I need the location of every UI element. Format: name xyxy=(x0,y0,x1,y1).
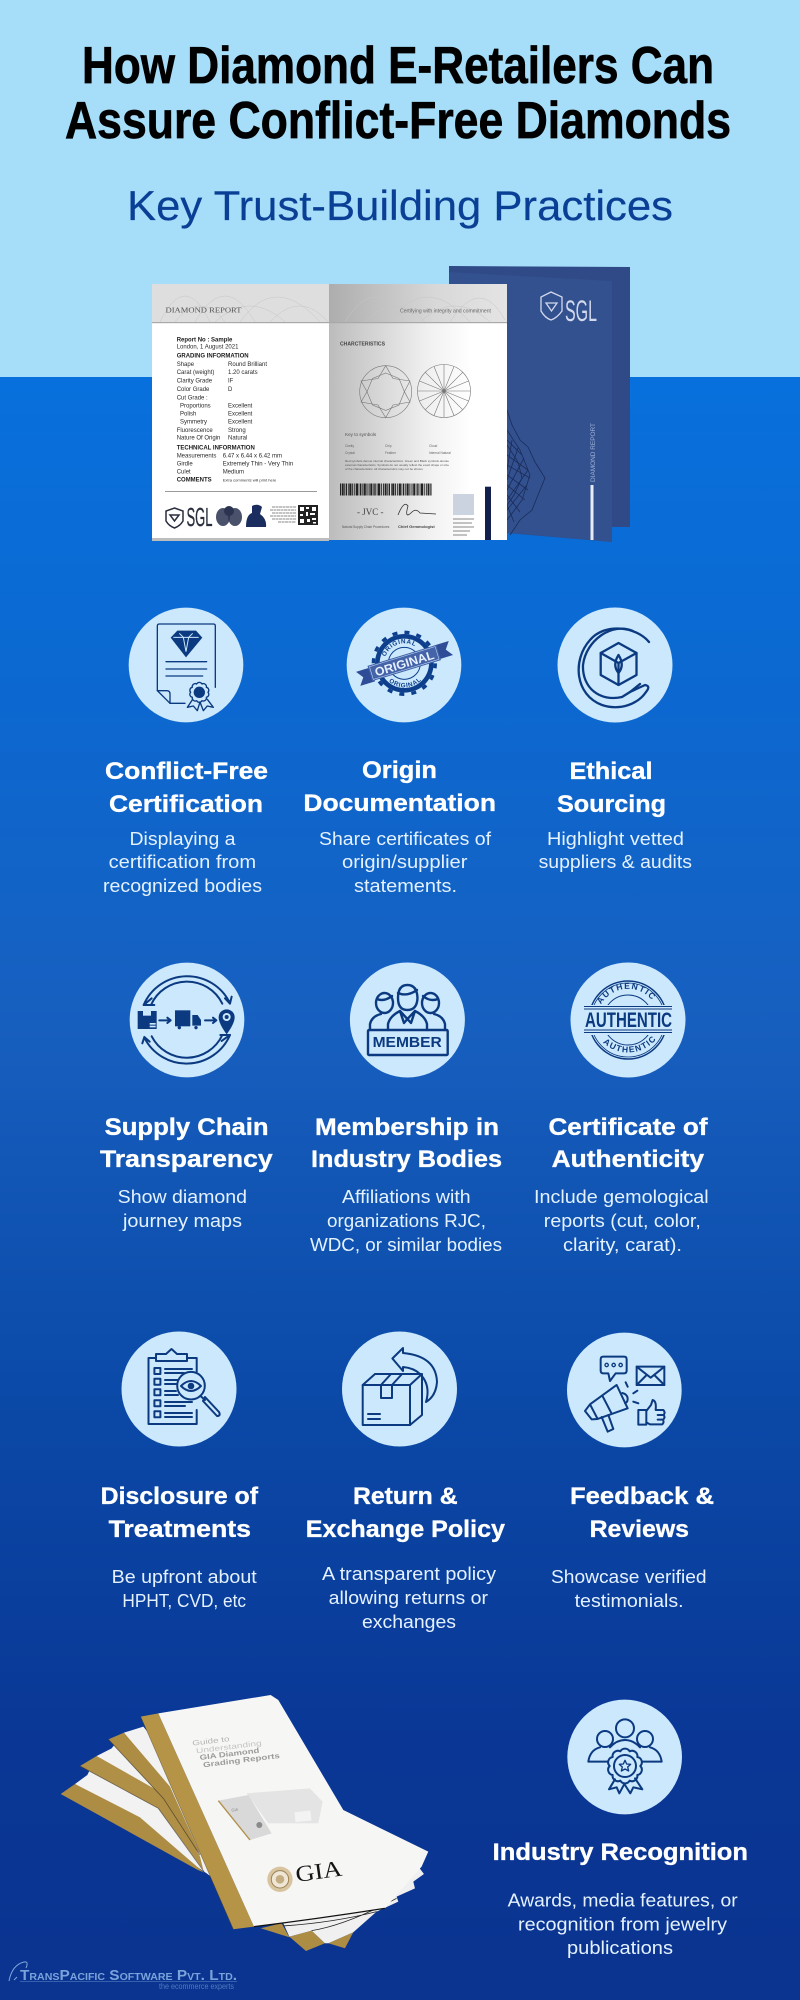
report: open pages: Cloud xyxy=(429,444,438,448)
report: open pages: CHARCTERISTICS xyxy=(340,342,385,348)
report: open pages: Natural xyxy=(228,436,247,442)
description: A transparent policy xyxy=(322,1563,497,1584)
heading xyxy=(306,1483,505,1543)
report: open pages: Certifying with integrity and commitment xyxy=(400,308,492,314)
description: exchanges xyxy=(362,1611,456,1632)
heading: Membership in xyxy=(315,1114,499,1141)
report: open pages: Excellent xyxy=(228,412,253,418)
report: open pages: Red symbols denote internal characteristics. Green and Black symbols denote xyxy=(345,459,449,463)
description: origin/supplier xyxy=(342,851,468,872)
icon: supply chain loop xyxy=(130,963,244,1077)
heading: Authenticity xyxy=(552,1146,704,1173)
description xyxy=(319,828,492,896)
report: open pages: - JVC - xyxy=(357,507,384,517)
report: open pages: Cut Grade : xyxy=(177,396,208,402)
report: open pages: Internal Natural xyxy=(429,451,451,455)
icon: member group xyxy=(350,962,465,1078)
icon: megaphone with feedback symbols xyxy=(567,1333,682,1447)
report: open pages: D xyxy=(228,387,233,393)
report: open pages: Fluorescence xyxy=(177,428,213,434)
description xyxy=(539,828,692,872)
report: open pages: Polish xyxy=(180,412,196,418)
heading xyxy=(557,758,666,818)
heading xyxy=(311,1114,502,1173)
icon: original stamp: ORIGINAL xyxy=(382,638,415,656)
heading: Transparency xyxy=(100,1146,273,1173)
top brochure sheet: Understanding xyxy=(195,1738,262,1755)
heading xyxy=(101,1483,259,1543)
top brochure sheet: GIA xyxy=(294,1856,344,1887)
icon: member group: MEMBER xyxy=(373,1034,442,1051)
report: open pages: Clarity xyxy=(345,444,354,448)
report: open pages: Extra comments will print here xyxy=(223,477,277,482)
report: open pages: Measurements xyxy=(177,453,216,459)
description: Showcase verified xyxy=(551,1566,707,1587)
description: statements. xyxy=(354,875,457,896)
description: Highlight vetted xyxy=(547,828,684,849)
footer logo: TransPacific Software: the ecommerce experts xyxy=(159,1982,234,1991)
card: supply chain transparency xyxy=(100,963,273,1231)
SGL diamond report image xyxy=(152,266,630,542)
heading: Certificate of xyxy=(548,1114,708,1141)
report: open pages: Key to symbols xyxy=(345,432,377,437)
footer logo: TransPacific Software: TransPacific Software Pvt. Ltd. xyxy=(20,1968,237,1984)
icon: checklist with magnifier xyxy=(122,1332,236,1446)
heading: Return & xyxy=(353,1483,458,1510)
report: open pages: GRADING INFORMATION xyxy=(177,354,249,360)
report: open pages: of the characteristics. All characteristics may not be shown. xyxy=(345,467,424,471)
report: open pages: Nature Of Origin xyxy=(177,436,220,442)
description: WDC, or similar bodies xyxy=(310,1234,502,1255)
report: open pages: Excellent xyxy=(228,404,253,410)
card: certificate of authenticity xyxy=(534,962,709,1255)
description: recognition from jewelry xyxy=(518,1914,728,1935)
report: open pages xyxy=(152,284,507,541)
report: open pages: Feather xyxy=(385,451,397,455)
description: HPHT, CVD, etc xyxy=(122,1590,246,1611)
heading: Documentation xyxy=(303,790,496,817)
description: journey maps xyxy=(122,1210,242,1231)
report: open pages: Crystal xyxy=(345,451,355,455)
icon: box with return arrow xyxy=(342,1332,457,1446)
card: feedback and reviews xyxy=(551,1333,714,1611)
icon: authentic stamp xyxy=(570,962,686,1078)
description: reports (cut, color, xyxy=(544,1210,701,1231)
report: open pages: IF xyxy=(228,378,234,384)
heading: Conflict-Free xyxy=(105,758,268,785)
description: Be upfront about xyxy=(112,1566,257,1587)
heading: Disclosure of xyxy=(101,1483,259,1510)
description: Displaying a xyxy=(130,828,236,849)
description xyxy=(310,1186,502,1255)
description: certification from xyxy=(109,851,256,872)
heading xyxy=(570,1483,714,1543)
title xyxy=(65,37,731,150)
report: open pages: Chief Gemmologist xyxy=(398,524,435,529)
report: open pages: Round Brilliant xyxy=(228,362,267,368)
icon: hand holding box with leaf xyxy=(558,608,672,722)
card: ethical sourcing xyxy=(539,608,692,872)
report: open pages: Natural Supply Chain Procedures xyxy=(342,525,390,529)
report: open pages: Chip xyxy=(385,444,392,448)
icon: authentic stamp: AUTHENTIC xyxy=(598,982,655,1004)
card: return and exchange policy xyxy=(306,1332,505,1632)
footer logo: TransPacific Software xyxy=(9,1962,237,1991)
icon: diamond certificate xyxy=(129,608,243,722)
report: open pages: Color Grade xyxy=(177,387,210,393)
report: open pages: Extremely Thin - Very Thin xyxy=(223,461,293,467)
description xyxy=(551,1566,707,1611)
report: open pages: Clarity Grade xyxy=(177,378,213,384)
description: publications xyxy=(567,1937,673,1958)
top brochure sheet: Grading Reports xyxy=(202,1751,280,1769)
report: open pages: external characteristics. Symbols do not usually reflect the exact shape or size xyxy=(345,463,449,467)
heading: Industry Bodies xyxy=(311,1146,502,1173)
card: disclosure of treatments xyxy=(101,1332,259,1611)
icon: original stamp: ORIGINAL xyxy=(390,678,421,688)
report: open pages: Medium xyxy=(223,470,244,476)
report: open pages: 6.47 x 6.44 x 6.42 mm xyxy=(223,453,282,459)
top brochure sheet xyxy=(141,1695,428,1929)
subtitle: Key Trust-Building Practices xyxy=(127,182,673,229)
heading: Sourcing xyxy=(557,791,666,818)
folder: blue cover xyxy=(449,266,630,542)
report: open pages: COMMENTS xyxy=(177,477,212,483)
report: open pages: DIAMOND REPORT xyxy=(166,306,242,314)
card: membership in industry bodies xyxy=(310,962,502,1255)
heading: Industry Recognition xyxy=(493,1839,748,1866)
report: open pages: Carat (weight) xyxy=(177,370,214,376)
description xyxy=(534,1186,709,1255)
heading: Exchange Policy xyxy=(306,1516,505,1543)
icon: group with award badge xyxy=(567,1700,682,1814)
report: open pages: Proportions xyxy=(180,404,211,410)
description xyxy=(118,1186,247,1231)
heading: Ethical xyxy=(570,758,652,785)
description: testimonials. xyxy=(575,1590,684,1611)
description: clarity, carat). xyxy=(563,1234,682,1255)
report: open pages: Excellent xyxy=(228,420,253,426)
report: open pages: 1.20 carats xyxy=(228,370,258,376)
report: open pages: Shape xyxy=(177,362,195,368)
description: Show diamond xyxy=(118,1186,247,1207)
report: open pages: Report No : Sample xyxy=(177,338,233,344)
icon: authentic stamp: AUTHENTIC xyxy=(603,1036,655,1052)
report: open pages: Culet xyxy=(177,470,191,476)
folder: blue cover: DIAMOND REPORT xyxy=(590,423,597,482)
heading: Treatments xyxy=(109,1516,251,1543)
heading xyxy=(303,757,496,817)
top brochure sheet: GIA xyxy=(231,1807,239,1813)
card: conflict-free certification xyxy=(103,608,268,896)
heading: Feedback & xyxy=(570,1483,714,1510)
folder: blue cover: SGL xyxy=(565,295,597,328)
heading: Supply Chain xyxy=(105,1114,269,1141)
report: open pages: SGL xyxy=(186,502,212,532)
description: recognized bodies xyxy=(103,875,262,896)
icon: authentic stamp: AUTHENTIC xyxy=(585,1009,672,1032)
heading xyxy=(105,758,268,818)
description: suppliers & audits xyxy=(539,851,692,872)
description: allowing returns or xyxy=(329,1587,488,1608)
description: Include gemological xyxy=(534,1186,709,1207)
report: open pages: Strong xyxy=(228,428,246,434)
heading: Reviews xyxy=(590,1516,689,1543)
heading xyxy=(100,1114,273,1173)
icon: original stamp: ORIGINAL xyxy=(373,648,436,679)
report: open pages: Girdle xyxy=(177,461,193,467)
description: Affiliations with xyxy=(342,1186,471,1207)
report: open pages: Symmetry xyxy=(180,420,207,426)
heading xyxy=(548,1114,708,1173)
barcode xyxy=(340,484,432,496)
report: open pages: London, 1 August 2021 xyxy=(177,344,239,350)
light blue header background xyxy=(0,0,800,377)
report: open pages: TECHNICAL INFORMATION xyxy=(177,445,255,451)
description xyxy=(103,828,262,896)
description: Share certificates of xyxy=(319,828,492,849)
description: organizations RJC, xyxy=(327,1210,486,1231)
heading: Certification xyxy=(109,791,263,818)
description xyxy=(112,1566,257,1611)
card: origin documentation xyxy=(303,608,496,896)
top brochure sheet: Guide to xyxy=(192,1734,230,1748)
GIA brochures image xyxy=(61,1695,428,1951)
heading: Origin xyxy=(362,757,437,784)
description xyxy=(322,1563,497,1632)
card: industry recognition xyxy=(493,1700,748,1958)
icon: original stamp xyxy=(346,608,462,722)
top brochure sheet: GIA Diamond xyxy=(199,1746,260,1762)
description: Awards, media features, or xyxy=(508,1890,738,1911)
description xyxy=(508,1890,738,1958)
